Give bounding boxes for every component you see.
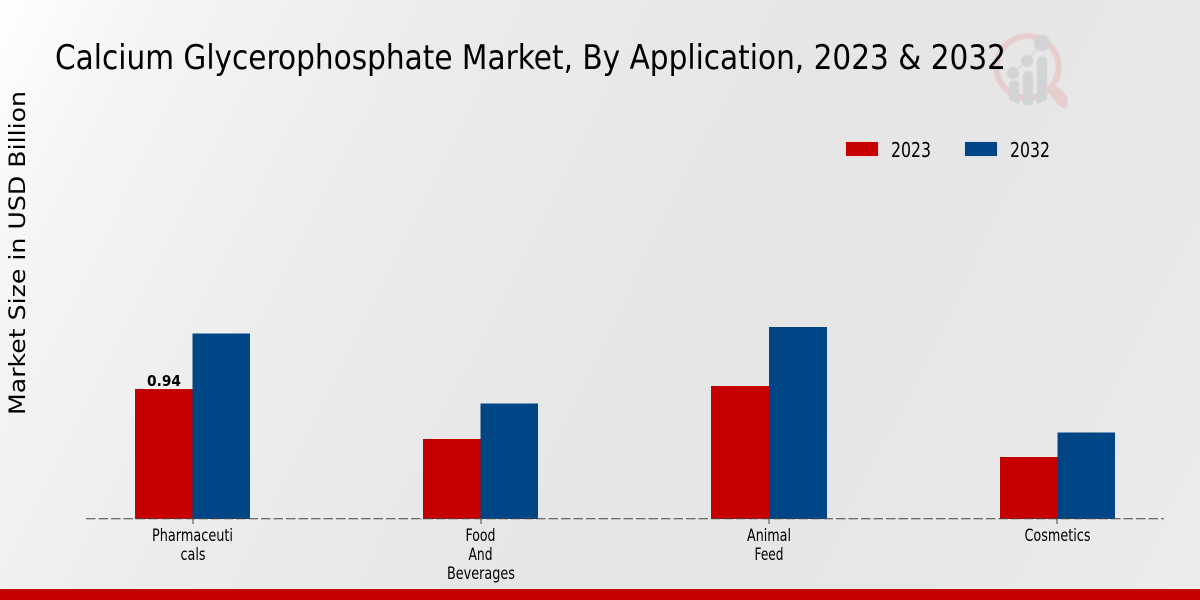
- label: Pharmaceuticals: cals: [180, 545, 206, 564]
- bottom red band: [0, 589, 1200, 600]
- label: Pharmaceuticals: Pharmaceuti: [152, 526, 233, 545]
- icon: watermark logo magnifier: [996, 35, 1064, 105]
- label: Animal Feed: Animal: [747, 526, 791, 545]
- x-axis category labels: [152, 526, 1090, 583]
- y-axis label: Market Size in USD Billion: [5, 91, 31, 415]
- bar chart: [135, 327, 1115, 519]
- label: Food And Beverages: And: [468, 545, 492, 564]
- group: Cosmetics: [1000, 432, 1115, 519]
- label: Food And Beverages: Beverages: [447, 564, 515, 583]
- group: Food And Beverages: [423, 404, 538, 519]
- x-axis baseline: [86, 519, 1164, 524]
- legend item: 2032: [964, 138, 1050, 162]
- group: Pharmaceuticals: [135, 334, 250, 519]
- group: Animal Feed: [711, 327, 827, 519]
- title: Calcium Glycerophosphate Market, By Application, 2023 & 2032: [55, 38, 1006, 78]
- legend item: 2032: 2032: [1010, 138, 1050, 162]
- legend item: 2023: [846, 138, 931, 162]
- label: Animal Feed: [747, 526, 791, 564]
- value label: 0.94: [147, 372, 181, 390]
- label: Animal Feed: Feed: [754, 545, 784, 564]
- label: Cosmetics: Cosmetics: [1024, 526, 1090, 545]
- label: Pharmaceuticals: [152, 526, 233, 564]
- label: Food And Beverages: Food: [466, 526, 496, 545]
- label: Food And Beverages: [447, 526, 515, 583]
- legend: [846, 138, 1050, 162]
- legend item: 2023: 2023: [891, 138, 931, 162]
